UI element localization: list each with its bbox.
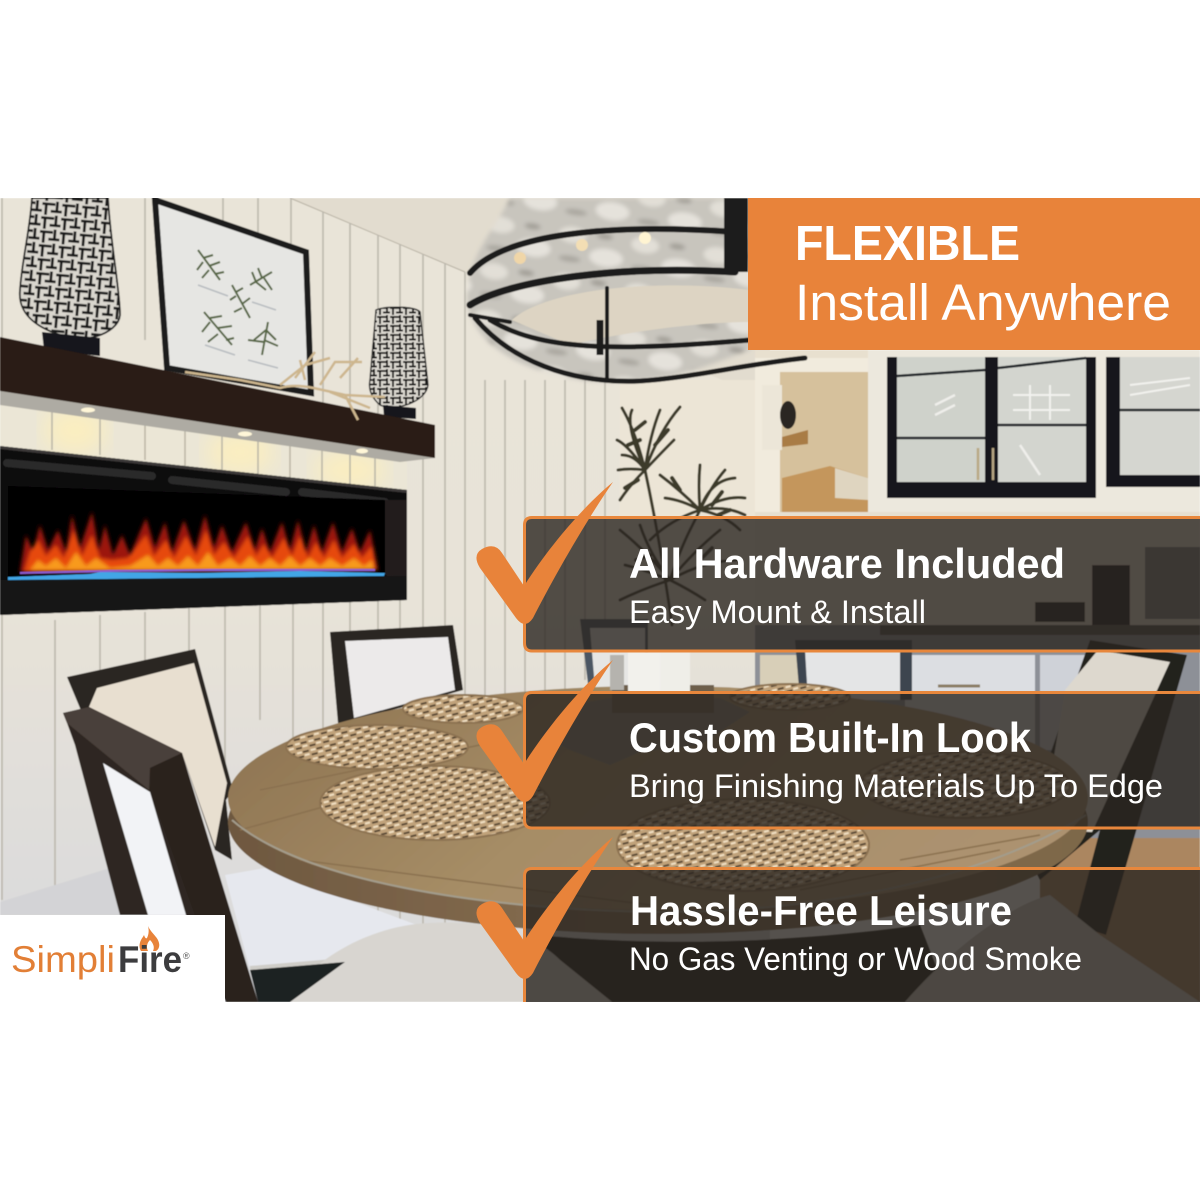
floor (1040, 838, 1200, 1002)
heading: flexible: FLEXIBLE (795, 217, 1020, 271)
mantel decor: branch (185, 352, 385, 420)
plant (617, 407, 745, 625)
chair: left back (67, 649, 425, 970)
icon: check mark 2 (476, 660, 613, 802)
icon: check mark 1 (476, 482, 613, 624)
flames (20, 512, 378, 572)
mantel decor: wire vase left (20, 198, 120, 356)
mantel decor: wire vase right (369, 307, 428, 419)
panel: flexible header (748, 198, 1200, 350)
photo: dining room with wall fireplace (0, 198, 1200, 1002)
panel: all hardware included (476, 482, 1200, 651)
panel: custom built-in look (476, 660, 1200, 828)
logo wordmark: Fire: Fire (118, 939, 182, 980)
chandelier (467, 198, 805, 382)
subheading: install anywhere: Install Anywhere (795, 274, 1171, 331)
text: easy mount and install: Easy Mount & Install (629, 594, 926, 630)
mantel decor: framed botanical print (155, 200, 311, 393)
heading: all hardware included: All Hardware Included (629, 540, 1065, 587)
wall with vertical paneling (0, 198, 770, 1002)
fireplace (0, 446, 407, 615)
panel outline (524, 868, 1200, 1002)
under-table shadow and front seats (250, 895, 1200, 1002)
icon: flame (140, 926, 159, 951)
mantel (0, 337, 435, 458)
centerpiece (610, 652, 714, 713)
heading: hassle-free leisure: Hassle-Free Leisure (630, 887, 1012, 934)
table (228, 686, 1088, 934)
logo registered mark: ® (183, 951, 190, 961)
text: no gas venting or wood smoke: No Gas Venting or Wood Smoke (629, 941, 1082, 977)
placemats (286, 684, 1070, 891)
upholstered chairs behind table (580, 619, 1187, 935)
logo: SimpliFire (0, 915, 225, 1002)
heading: custom built-in look: Custom Built-In Look (629, 714, 1032, 761)
under-mantel lighting (0, 391, 435, 490)
icon: check mark 3 (476, 837, 613, 979)
kitchen background (620, 350, 1200, 840)
text: bring finishing materials up to edge: Bring Finishing Materials Up To Edge (629, 768, 1163, 804)
chair: far back (330, 625, 463, 723)
chair: front (63, 707, 258, 1002)
panel: hassle-free leisure (476, 837, 1200, 1002)
logo wordmark: Simpli: Simpli (11, 939, 115, 980)
